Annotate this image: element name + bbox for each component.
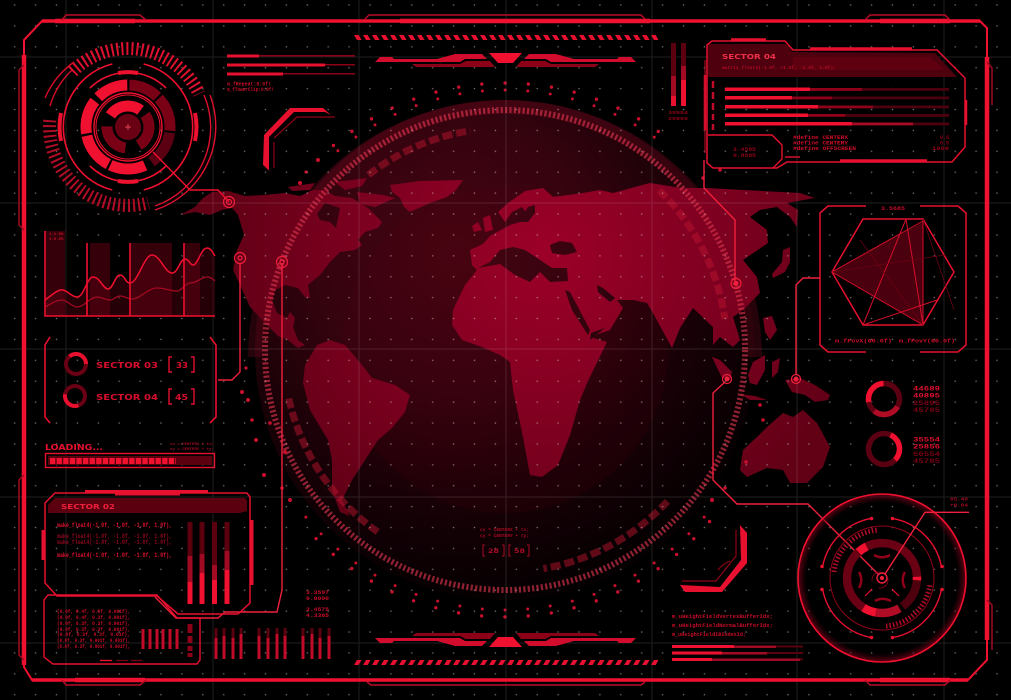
donut stats 2: 45785 [913,458,940,465]
panel: sector 04: #define CENTERX [793,134,849,141]
donut stats 1 [868,384,940,414]
panel: matrix values [44,595,200,664]
panel: matrix values: (0.0f, 0.3f, 0.001f, 0.001f), [57,644,130,650]
line chart: 1.0.2% [49,238,64,242]
panel: sector 04: 3.4595 [733,147,756,153]
panel: hexagon radar [820,205,966,352]
panel: sector 04: 0.8595 [733,153,756,159]
centre readout [480,527,529,556]
level bars: top right: 25856 [668,116,688,122]
readout: top left bars and labels [227,54,355,93]
panel: matrix values: (0.0f, 0.4f, 0.6f, 0.001f), [57,609,130,615]
radar gauge: bottom right [798,494,969,662]
donut stats 2: 56554 [913,451,940,458]
donut stats 1: 25895 [913,400,940,407]
centre readout: 28 [488,547,500,555]
panel: sector 04: SECTOR 04 [722,53,776,61]
donut stats 2: 35554 [913,436,940,444]
top centre decoration [354,35,658,67]
centre readout: 58 [514,547,526,555]
donut stats 2 [868,434,940,465]
donut stats 1: 44689 [913,386,940,392]
level bars: top right [668,43,688,122]
greenland [390,180,463,212]
donut: sector 03 [66,354,86,374]
node: alaska [224,196,234,208]
node: west coast [218,252,246,380]
readout: bottom left numbers: 0.0000 [306,595,329,602]
line chart: 1.1.0% [49,233,64,237]
arctic islands [288,178,395,207]
loading bar: LOADING... [45,443,103,452]
donut: sector 04 [65,386,85,406]
world map [180,178,830,516]
panel: sector 04: 0.5 [940,140,949,146]
text block: height field buffers [672,614,803,661]
globe disc [255,100,755,600]
panel: matrix values: (0.0f, 0.3f, 0.3f, 0.001f), [57,627,130,633]
text block: height field buffers: m_uHeightFieldNormalBufferIdx; [672,623,773,629]
panel: matrix values: (0.0f, 0.4f, 0.3f, 0.001f), [57,615,130,621]
bracket: lower right of globe [680,525,747,592]
text block: height field buffers: m_uHeightFieldVertexBufferIdx; [672,614,773,620]
panel: sector 02: make_float4(-1.0f, -1.0f, -1.0f, 1.0f), [57,552,172,559]
panel: sector list: SECTOR 03 [96,361,158,370]
radar gauge: bottom right: 05.40 [950,496,968,502]
scattered radial dots [240,83,765,617]
panel: sector 02: SECTOR 02 [61,503,115,511]
line chart [45,231,215,316]
panel: sector 04: 0.5 [940,135,949,141]
readout: top left bars and labels: m_fTowerClip:0.0f! [227,87,274,93]
readout: top left bars and labels: m_fRepeat:0.0f! [227,82,271,88]
panel: sector 04: matrix_float4(-1.0f, +1.0f, -1.0f, 1.0f); [722,65,836,71]
text block: height field buffers: m_uHeightFieldIBIndexId; [672,632,746,638]
donut stats 1: 45785 [913,407,940,414]
panel: sector 02 [43,492,252,614]
loading bar: cx = CENTERX + tx; [170,443,214,447]
panel: sector list: 33 [176,361,188,370]
donut stats 1: 40895 [913,392,940,400]
north america [180,190,382,348]
panel: sector 04 [705,40,966,168]
panel: sector 02: make_float4(-1.0f, -1.0f, -1.0f, 1.0f), [57,539,172,546]
australia [740,410,830,483]
centre readout: cx = CENTERX + tx; [480,527,529,533]
asian and pacific islands [472,215,830,402]
readout: bottom left numbers: 3.4575 [306,606,330,613]
donut stats 2: 25856 [913,444,940,450]
panel: sector 04: #define OFFSCREEN [793,145,856,152]
panel: sector list [45,337,216,423]
vertical bars [188,522,230,604]
loading bar [45,443,214,468]
south america [303,340,410,516]
globe tick ring [265,110,745,590]
radar gauge: bottom right: +0.04 [950,502,968,508]
panel: sector list: 45 [175,393,188,402]
africa and eurasia [452,183,815,477]
inland seas [317,203,615,340]
loading bar: cy = CENTERY + ty; [170,448,214,452]
panel: sector 04: 1000 [932,146,949,152]
node: sumatra with connector [713,374,878,574]
level bars: top right: 35554 [668,110,688,116]
radar gauge: top left [45,49,229,210]
node: central america [155,256,288,618]
panel: sector 02: make_float4(-1.0f, -1.0f, -1.0f, 1.0f), [57,522,172,529]
panel: hexagon radar: 3.5685 [881,205,906,212]
equaliser bars [216,628,329,659]
bracket: upper left of globe [263,108,335,173]
readout: bottom left numbers: 4.3365 [306,612,330,619]
panel: sector list: SECTOR 04 [96,393,158,402]
panel: matrix values: (0.0f, 0.3f, 0.3f, 0.01f), [57,632,130,638]
bottom centre decoration [354,633,658,665]
node: new guinea [792,278,820,384]
panel: matrix values: (0.0f, 0.3f, 0.3f, 0.001f), [57,621,130,627]
panel: sector 04: #define CENTERY [793,140,849,146]
panel: matrix values: (0.0f, 0.3f, 0.001f, 0.001f), [57,638,130,644]
panel: hexagon radar: m_fFovX(60.0f) [835,338,892,344]
node: china [704,160,741,288]
readout: bottom left numbers: 3.3597 [306,589,329,596]
readout: bottom left numbers [306,589,330,619]
panel: hexagon radar: m_fFovY(60.0f) [899,338,955,344]
centre readout: cy = CENTERY + ty; [480,533,529,539]
horizontal bars [725,88,949,126]
panel: sector 02: make_float4(-1.0f, -1.0f, -1.0f, 1.0f), [57,533,172,540]
